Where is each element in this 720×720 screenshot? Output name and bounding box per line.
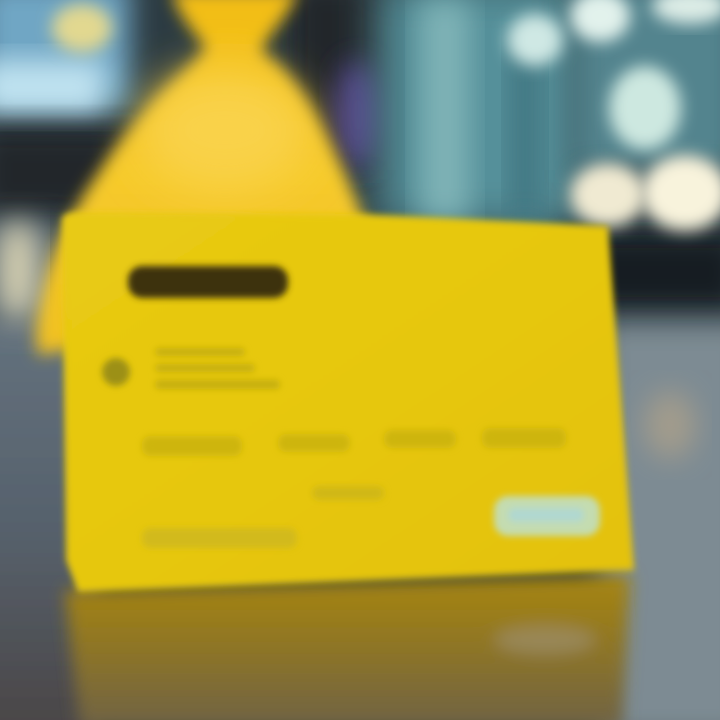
cardholder name <box>142 528 297 548</box>
yellow bell-shaped object behind card <box>0 0 365 355</box>
card number groups <box>142 428 566 456</box>
card reflection on table <box>65 575 630 720</box>
light blue badge <box>494 496 600 536</box>
small card text lines <box>155 348 280 389</box>
chip icon <box>102 358 130 386</box>
card brand logo <box>128 266 288 298</box>
expiry date <box>312 486 384 500</box>
yellow credit card <box>62 212 634 592</box>
bokeh lights <box>52 0 720 459</box>
